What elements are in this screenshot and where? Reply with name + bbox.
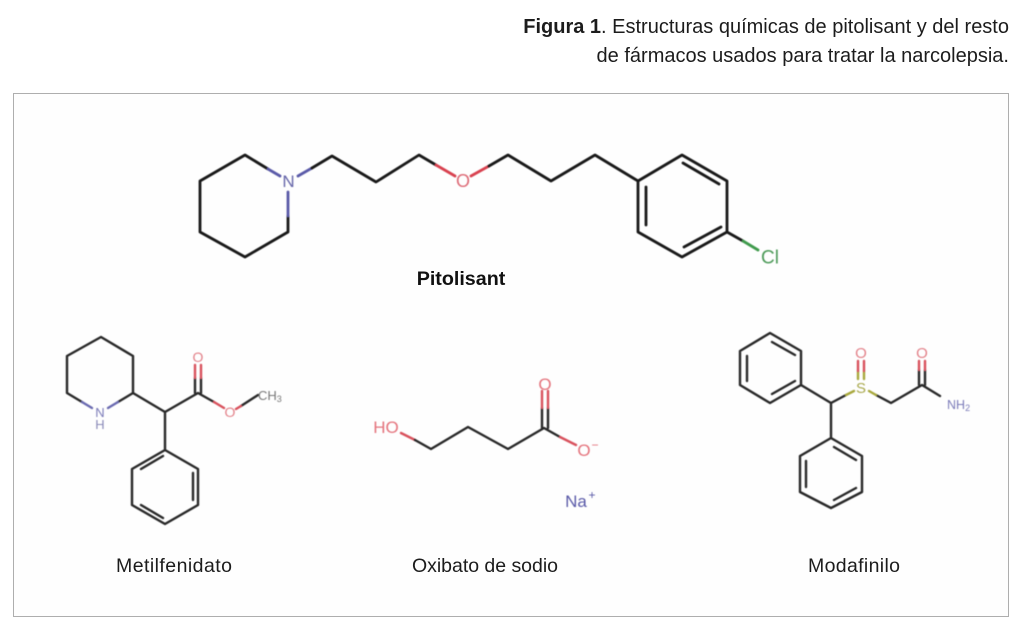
structure: metilfenidato: CH [258, 388, 277, 403]
structure: oxibato de sodio: + [588, 488, 596, 502]
title: figure caption: Figura 1. Estructuras químicas de pitolisant y del resto [523, 16, 1009, 38]
structure: pitolisant: Cl [761, 248, 779, 268]
structure: metilfenidato: 3 [277, 394, 282, 404]
label: Pitolisant: Pitolisant [417, 268, 506, 290]
structure: oxibato de sodio: O [577, 441, 591, 460]
panel: chemical structures [13, 93, 1009, 617]
structure: modafinilo [740, 333, 970, 508]
structure: oxibato de sodio: HO [373, 418, 399, 437]
label: Modafinilo: Modafinilo [808, 555, 900, 577]
label: Oxibato de sodio: Oxibato de sodio [412, 555, 558, 577]
title: figure caption [523, 16, 1009, 67]
title: figure caption: de fármacos usados para tratar la narcolepsia. [597, 45, 1009, 67]
structure: modafinilo: O [916, 345, 928, 362]
structure: metilfenidato: H [95, 417, 105, 432]
structure: oxibato de sodio: − [591, 438, 599, 452]
structure: metilfenidato: N [95, 405, 105, 420]
structure: oxibato de sodio [373, 375, 599, 511]
structure: pitolisant [200, 155, 779, 268]
structure: pitolisant: N [282, 172, 295, 191]
structure: metilfenidato: O [225, 404, 236, 420]
structure: modafinilo: NH [947, 398, 965, 412]
structure: metilfenidato [67, 337, 282, 524]
structure: pitolisant: O [456, 171, 470, 191]
structure: modafinilo: O [855, 345, 867, 362]
structure: modafinilo: 2 [965, 403, 970, 413]
structure: oxibato de sodio: Na [565, 492, 587, 511]
structure: metilfenidato: O [193, 349, 204, 365]
label: Metilfenidato: Metilfenidato [116, 555, 232, 577]
structure: modafinilo: S [856, 380, 866, 397]
structure: oxibato de sodio: O [538, 375, 552, 394]
